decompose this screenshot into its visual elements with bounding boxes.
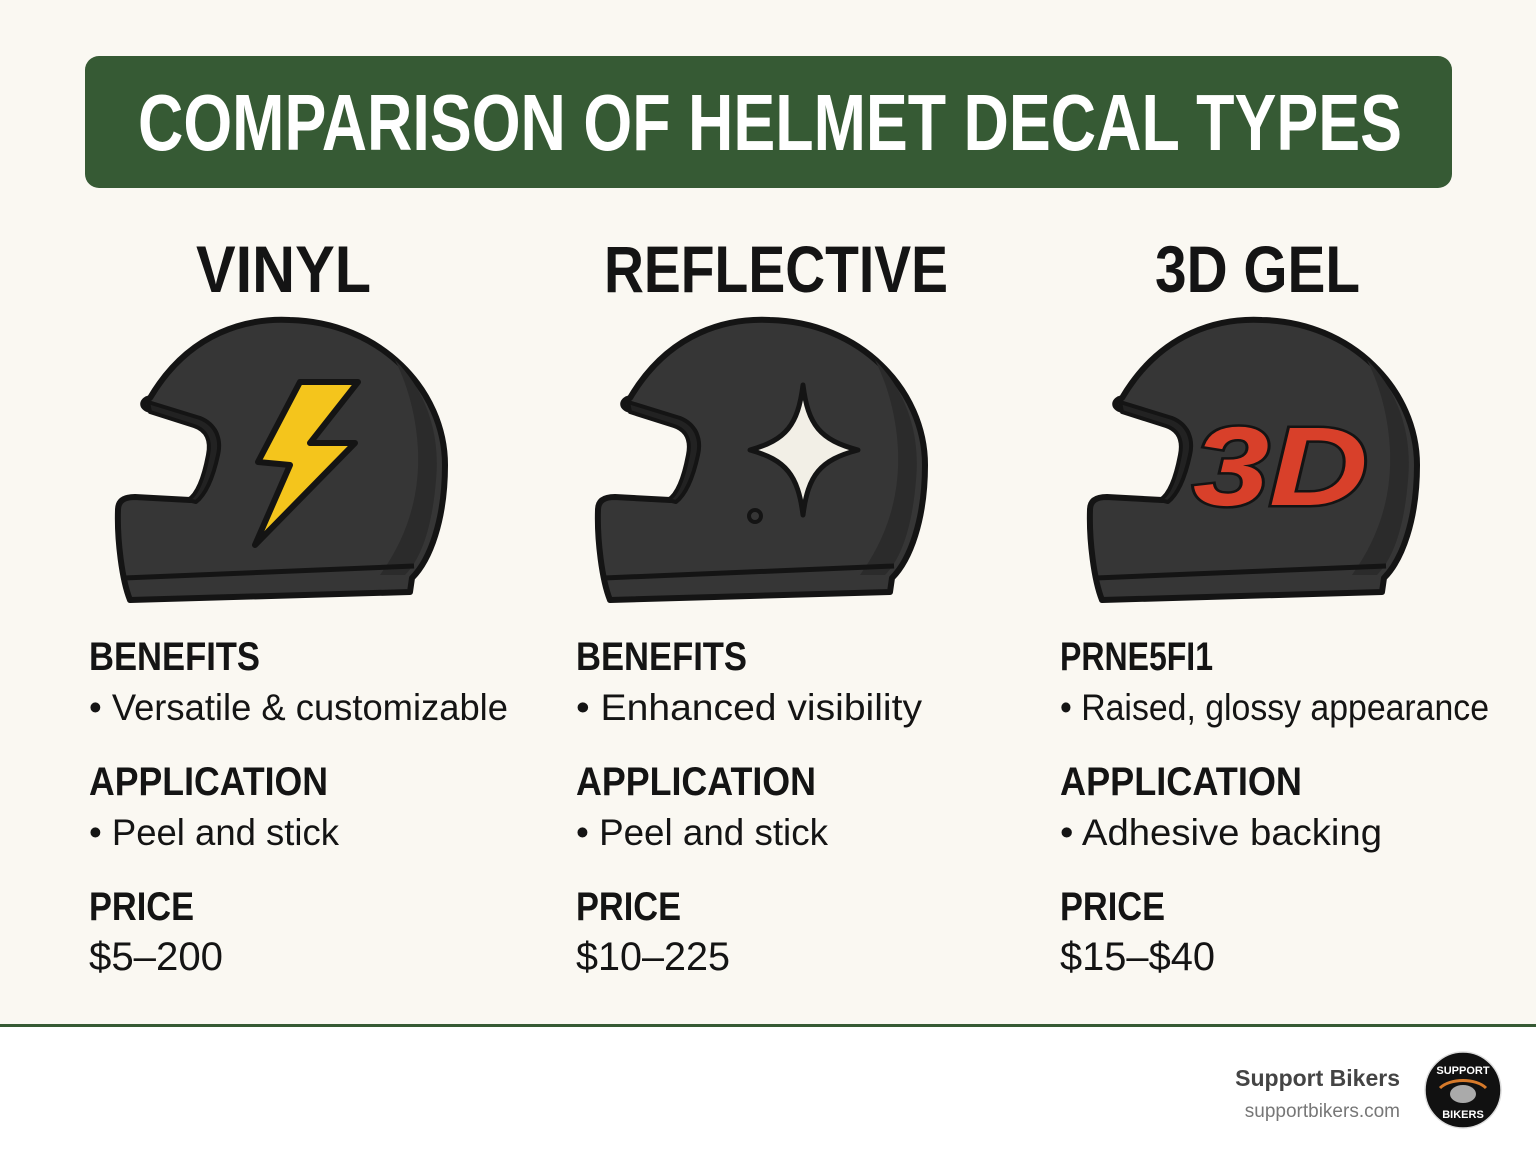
text block: 3d gel details: $15–$40 bbox=[1060, 935, 1215, 979]
text block: vinyl details: PRICE bbox=[89, 885, 194, 929]
heading: 3d gel: 3D GEL bbox=[1155, 232, 1360, 306]
footer brand text: Support Bikers bbox=[1235, 1065, 1400, 1091]
text block: 3d gel details: • Adhesive backing bbox=[1060, 812, 1382, 853]
icon: vinyl helmet with lightning bbox=[118, 320, 445, 600]
footer brand text: supportbikers.com bbox=[1245, 1101, 1400, 1122]
text block: reflective details bbox=[576, 635, 923, 979]
text block: vinyl details: • Versatile & customizable bbox=[89, 687, 508, 728]
text block: vinyl details bbox=[89, 635, 508, 979]
text block: vinyl details: APPLICATION bbox=[89, 760, 328, 804]
icon: 3d gel helmet: 3D bbox=[1193, 404, 1368, 529]
text block: reflective details: APPLICATION bbox=[576, 760, 816, 804]
icon: 3d gel helmet bbox=[1090, 320, 1417, 600]
text block: vinyl details: $5–200 bbox=[89, 935, 223, 979]
text block: 3d gel details: • Raised, glossy appearance bbox=[1060, 687, 1489, 728]
icon: support bikers logo bbox=[1425, 1052, 1501, 1128]
text block: vinyl details: BENEFITS bbox=[89, 635, 260, 679]
text block: 3d gel details bbox=[1060, 635, 1489, 979]
text block: 3d gel details: APPLICATION bbox=[1060, 760, 1302, 804]
text block: 3d gel details: PRICE bbox=[1060, 885, 1165, 929]
footer bbox=[0, 1024, 1536, 1154]
icon: support bikers logo: SUPPORT bbox=[1436, 1065, 1490, 1077]
column: vinyl bbox=[89, 232, 508, 979]
heading: reflective: REFLECTIVE bbox=[604, 232, 948, 306]
icon: reflective helmet with star bbox=[598, 320, 925, 600]
text block: 3d gel details: PRNE5FI1 bbox=[1060, 635, 1213, 679]
column: 3d gel bbox=[1060, 232, 1489, 979]
icon: support bikers logo: BIKERS bbox=[1442, 1109, 1484, 1121]
footer brand text bbox=[1235, 1065, 1400, 1122]
text block: reflective details: • Enhanced visibility bbox=[576, 687, 923, 728]
column: reflective bbox=[576, 232, 948, 979]
text block: reflective details: $10–225 bbox=[576, 935, 730, 979]
text block: vinyl details: • Peel and stick bbox=[89, 812, 339, 853]
heading: vinyl: VINYL bbox=[196, 232, 371, 306]
text block: reflective details: BENEFITS bbox=[576, 635, 747, 679]
text block: reflective details: PRICE bbox=[576, 885, 681, 929]
title banner bbox=[85, 56, 1452, 188]
text block: reflective details: • Peel and stick bbox=[576, 812, 828, 853]
